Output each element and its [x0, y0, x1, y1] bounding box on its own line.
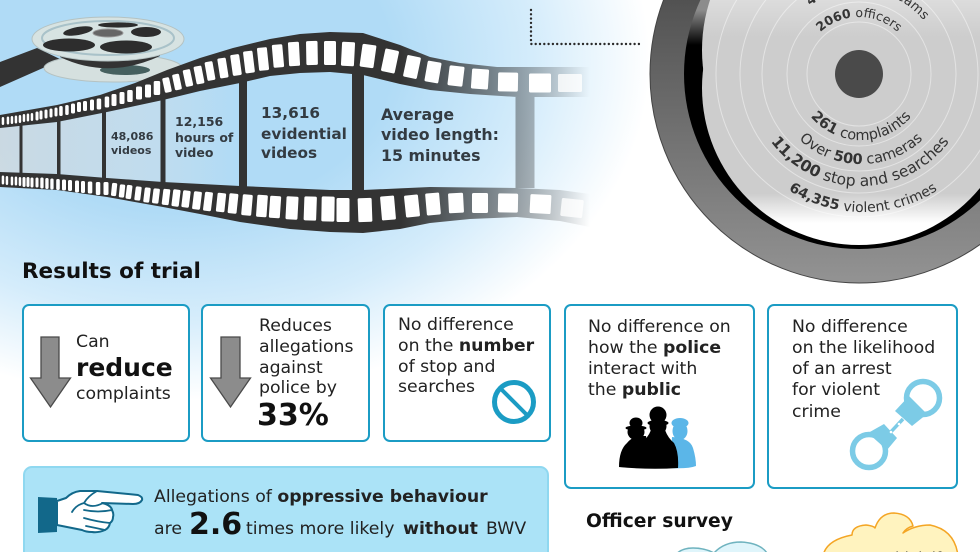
lens stat: officers: 2060 officers	[816, 8, 902, 32]
card text: of stop and	[398, 357, 495, 377]
film reel	[0, 17, 184, 87]
icon: police and public silhouettes	[619, 406, 696, 469]
callout text: without	[403, 519, 478, 539]
film frame text: hours: 12,156	[175, 114, 224, 129]
card text: of an arrest	[792, 359, 892, 379]
card text: Reduces	[259, 316, 332, 336]
film frame text: evidential: videos	[261, 144, 317, 162]
card text: No difference	[398, 315, 514, 335]
icon: down arrow	[210, 337, 250, 407]
lens hub	[835, 50, 883, 98]
film frame text: average length: Average	[381, 105, 454, 124]
callout text: are	[154, 519, 182, 539]
card text: against	[259, 358, 323, 378]
thought cloud: yellow	[823, 513, 958, 552]
icon: pointing hand	[38, 491, 142, 533]
film frame text: videos: videos	[111, 144, 152, 157]
card text: searches	[398, 377, 475, 397]
camera lens	[650, 0, 980, 284]
film frame text: hours: hours of	[175, 130, 234, 145]
film frame text: videos: 48,086	[111, 130, 154, 143]
card text: No difference on	[588, 317, 731, 337]
lens stat: complaints: 261 complaints	[811, 110, 910, 142]
callout: oppressive behaviour	[24, 467, 548, 552]
card text: 33%	[257, 398, 329, 433]
card text: Can	[76, 332, 110, 352]
card text: how the police	[588, 338, 721, 358]
heading: officer survey: Officer survey	[586, 511, 733, 532]
card: police interaction	[565, 305, 754, 488]
callout text: BWV	[486, 519, 526, 539]
card: arrests	[768, 305, 957, 488]
film strip	[0, 32, 590, 233]
icon: down arrow	[30, 337, 70, 407]
card text: reduce	[76, 353, 173, 382]
card: stop and searches	[384, 305, 550, 441]
card text: allegations	[259, 337, 354, 357]
icon: no symbol	[494, 382, 534, 422]
heading: results of trial: Results of trial	[22, 259, 201, 284]
card text: the public	[588, 380, 681, 400]
film frame text: evidential: evidential	[261, 125, 347, 143]
dotted connector	[531, 10, 643, 44]
card text: on the likelihood	[792, 338, 935, 358]
callout text: 2.6	[189, 507, 242, 542]
callout text: times more likely	[246, 519, 394, 539]
card text: crime	[792, 402, 841, 422]
lens stat: cameras: Over 500 cameras	[801, 134, 922, 164]
card: reduce complaints	[23, 305, 189, 441]
film frame text: evidential: 13,616	[261, 104, 320, 122]
film frame text: average length: video length:	[381, 125, 499, 144]
card: reduces allegations	[202, 305, 369, 441]
lens stat: stop and searches: 11,200 stop and searches	[772, 136, 948, 189]
card text: on the number	[398, 336, 534, 356]
thought cloud: blue	[672, 542, 770, 552]
card text: interact with	[588, 359, 697, 379]
lens stat: violent crimes: 64,355 violent crimes	[790, 183, 936, 212]
card text: No difference	[792, 317, 908, 337]
card text: complaints	[76, 384, 171, 404]
icon: handcuffs	[852, 382, 940, 468]
film frame text: hours: video	[175, 145, 214, 160]
film frame text: average length: 15 minutes	[381, 146, 481, 165]
callout text: Allegations of oppressive behaviour	[154, 487, 488, 507]
card text: police by	[259, 378, 337, 398]
card text: for violent	[792, 380, 880, 400]
